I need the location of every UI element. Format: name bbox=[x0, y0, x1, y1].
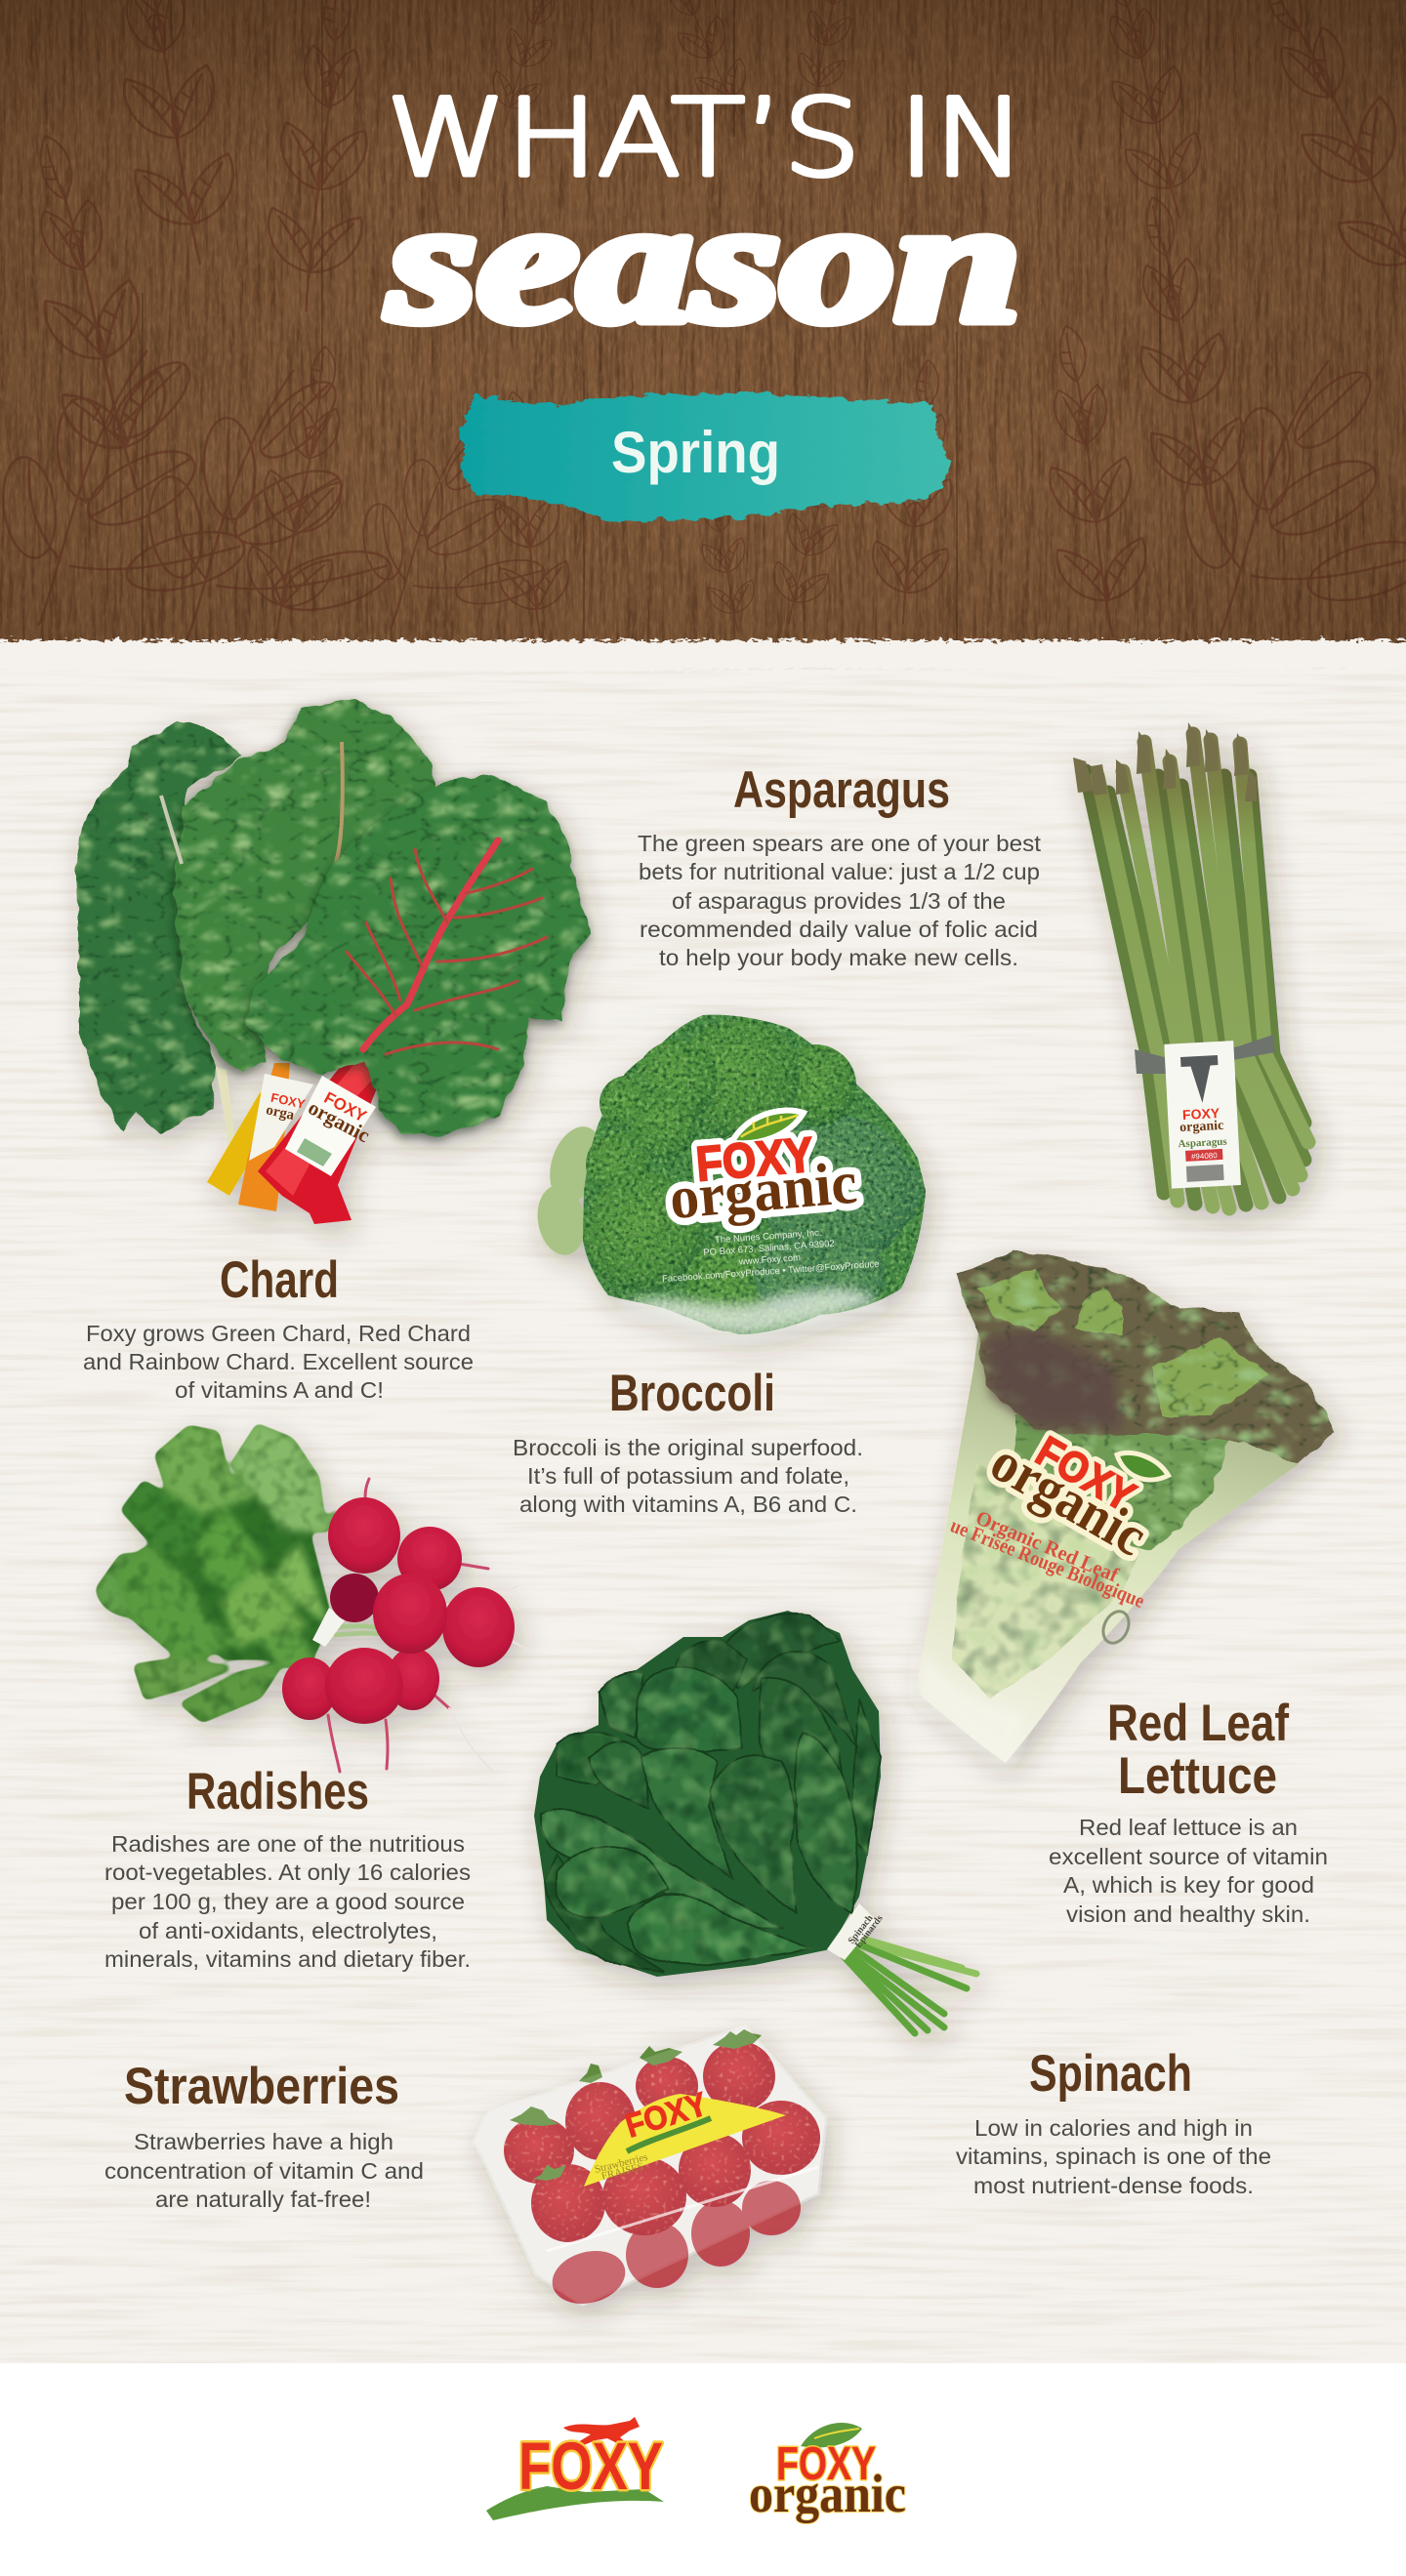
chard middle vein bbox=[317, 742, 343, 961]
logo: foxy bbox=[486, 2417, 664, 2520]
logo wordmark: FOXY bbox=[694, 1126, 815, 1192]
heading: Broccoli bbox=[609, 1365, 775, 1422]
lettuce green highlights bbox=[976, 1269, 1269, 1415]
leaf bbox=[801, 2423, 862, 2447]
chard tags: organic bbox=[305, 1095, 374, 1147]
body text: root-vegetables. At only 16 calories bbox=[104, 1860, 471, 1885]
body text: of anti-oxidants, electrolytes, bbox=[139, 1918, 437, 1943]
body text: A, which is key for good bbox=[1063, 1872, 1314, 1898]
lettuce bag sheen bbox=[921, 1650, 1025, 1761]
broccoli fine print bbox=[659, 1224, 880, 1285]
lettuce purple shade bbox=[984, 1328, 1123, 1430]
broccoli fine print: Facebook.com/FoxyProduce • Twitter@FoxyProduce bbox=[662, 1259, 880, 1285]
body text: recommended daily value of folic acid bbox=[640, 917, 1038, 942]
body text: The green spears are one of your best bbox=[638, 831, 1041, 856]
body text: per 100 g, they are a good source bbox=[111, 1889, 465, 1914]
radish tag bbox=[312, 1608, 345, 1647]
photo: red leaf lettuce bbox=[918, 1249, 1335, 1763]
asparagus band bbox=[1135, 1035, 1275, 1074]
leaf pattern bbox=[0, 0, 1406, 650]
logo leaf bbox=[729, 1109, 806, 1144]
asparagus tips bbox=[1073, 722, 1257, 801]
clamshell bbox=[476, 2027, 825, 2304]
body text bbox=[956, 2115, 1271, 2198]
body text: most nutrient-dense foods. bbox=[973, 2173, 1254, 2198]
spinach tag bbox=[827, 1903, 886, 1960]
body text bbox=[638, 831, 1041, 970]
body text: along with vitamins A, B6 and C. bbox=[519, 1492, 857, 1517]
body text: of asparagus provides 1/3 of the bbox=[672, 888, 1006, 914]
chard front leaf bbox=[247, 774, 592, 1136]
asparagus tag: Asparagus bbox=[1178, 1136, 1228, 1150]
lettuce USDA seal bbox=[1098, 1608, 1134, 1647]
heading bbox=[1107, 1695, 1289, 1805]
broccoli logo: organic bbox=[667, 1150, 859, 1232]
body text: Low in calories and high in bbox=[974, 2115, 1253, 2141]
photo: spinach bbox=[534, 1611, 976, 2033]
lettuce bag text: ue Frisée Rouge Biologique bbox=[947, 1513, 1148, 1613]
asparagus tag: FOXY bbox=[1182, 1105, 1220, 1123]
heading: Red Leaf bbox=[1107, 1695, 1289, 1752]
footer band bbox=[0, 2363, 1406, 2576]
body text: and Rainbow Chard. Excellent source bbox=[83, 1349, 474, 1374]
photo: chard bbox=[76, 699, 592, 1224]
body text: vitamins, spinach is one of the bbox=[956, 2144, 1271, 2169]
strawberry label: FOXY bbox=[621, 2085, 712, 2146]
heading: Spinach bbox=[1029, 2045, 1192, 2103]
broccoli logo: organic bbox=[667, 1150, 859, 1232]
spinach leaves bbox=[540, 1615, 881, 1972]
section: red leaf lettuce bbox=[1049, 1695, 1328, 1927]
asparagus tag bbox=[1164, 1041, 1241, 1189]
body text: Foxy grows Green Chard, Red Chard bbox=[86, 1321, 471, 1346]
body text bbox=[513, 1435, 863, 1517]
broccoli fine print: The Nunes Company, Inc. bbox=[715, 1228, 822, 1246]
body text: Red leaf lettuce is an bbox=[1079, 1815, 1298, 1840]
title bbox=[387, 76, 1025, 358]
heading: Chard bbox=[220, 1251, 339, 1309]
section: strawberries bbox=[104, 2058, 424, 2212]
broccoli side leaves bbox=[532, 1120, 611, 1259]
fox bbox=[563, 2417, 640, 2446]
logo outline: FOXY bbox=[694, 1126, 815, 1192]
broccoli fine print: www.Foxy.com bbox=[738, 1252, 801, 1268]
strawberry calyxes bbox=[510, 2029, 762, 2181]
section: broccoli bbox=[513, 1365, 863, 1517]
photo: broccoli bbox=[532, 1015, 926, 1335]
wood header bbox=[0, 0, 1406, 650]
body text: It’s full of potassium and folate, bbox=[527, 1463, 849, 1489]
body text bbox=[1049, 1815, 1328, 1927]
photo: asparagus bbox=[1073, 722, 1308, 1208]
body text: bets for nutritional value: just a 1/2 cup bbox=[639, 859, 1040, 884]
foxy wordmark: FOXY bbox=[776, 2438, 876, 2490]
body text bbox=[83, 1321, 474, 1403]
spinach tag: Spinach bbox=[847, 1913, 876, 1946]
strawberry label: FRAISES bbox=[600, 2161, 644, 2183]
strawberry label: Strawberries bbox=[594, 2151, 649, 2176]
title line: season: season bbox=[388, 165, 1021, 358]
radish roots bbox=[328, 1479, 527, 1772]
swoosh bbox=[486, 2486, 664, 2520]
section: chard bbox=[83, 1251, 474, 1403]
body text: minerals, vitamins and dietary fiber. bbox=[104, 1946, 471, 1972]
photo: strawberries bbox=[476, 2027, 825, 2311]
organic wordmark: organic bbox=[749, 2464, 906, 2523]
heading: Strawberries bbox=[124, 2058, 399, 2115]
chard tags: FOXY bbox=[269, 1090, 307, 1112]
spinach tag: Épinards bbox=[852, 1912, 886, 1950]
season badge: spring: Spring bbox=[611, 420, 780, 485]
asparagus spears bbox=[1086, 734, 1308, 1208]
chard stems bbox=[207, 1039, 383, 1224]
body text: Radishes are one of the nutritious bbox=[111, 1831, 465, 1857]
chard left vein bbox=[161, 796, 182, 864]
body text: Strawberries have a high bbox=[134, 2129, 393, 2154]
clamshell sheen bbox=[476, 2027, 825, 2304]
chard left leaf bbox=[76, 721, 243, 1133]
chard back leaf bbox=[174, 699, 436, 1072]
radish bulbs bbox=[282, 1497, 515, 1724]
broccoli plastic veil bbox=[625, 1288, 879, 1335]
strawberries lower bbox=[547, 2181, 801, 2311]
lettuce logo: organic bbox=[980, 1429, 1158, 1569]
body text: to help your body make new cells. bbox=[659, 945, 1018, 970]
body text: Broccoli is the original superfood. bbox=[513, 1435, 863, 1460]
body text: of vitamins A and C! bbox=[175, 1377, 384, 1403]
asparagus tag: #94080 bbox=[1191, 1151, 1218, 1162]
lettuce logo: organic bbox=[980, 1429, 1158, 1569]
broccoli logo bbox=[663, 1105, 859, 1232]
lettuce bag bbox=[918, 1325, 1299, 1763]
wordmark: FOXY bbox=[518, 2429, 663, 2504]
title line: what's in: WHAT’S IN bbox=[387, 76, 1025, 200]
lettuce logo: FOXY bbox=[1028, 1427, 1143, 1522]
chard tags: orga bbox=[265, 1102, 296, 1124]
body text bbox=[104, 2129, 424, 2212]
lettuce green layer bbox=[1015, 1415, 1230, 1552]
heading: Asparagus bbox=[733, 761, 950, 819]
torn paper edge bbox=[0, 640, 1406, 670]
spinach stems bbox=[842, 1938, 976, 2033]
chard tags: FOXY bbox=[321, 1088, 370, 1126]
section: radishes bbox=[104, 1763, 471, 1972]
season badge: spring bbox=[459, 392, 949, 522]
section: asparagus bbox=[638, 761, 1041, 970]
lettuce red leaves bbox=[957, 1249, 1335, 1464]
spinach base bbox=[534, 1611, 881, 1977]
chard tags bbox=[249, 1074, 376, 1176]
lettuce pale heart bbox=[952, 1464, 1162, 1698]
heading: Lettuce bbox=[1118, 1747, 1277, 1805]
paper background bbox=[0, 625, 1406, 2363]
photo: radishes bbox=[96, 1423, 527, 1772]
body text: excellent source of vitamin bbox=[1049, 1844, 1328, 1869]
body text: vision and healthy skin. bbox=[1066, 1901, 1310, 1927]
logo: foxy organic bbox=[749, 2423, 906, 2523]
lettuce logo: FOXY bbox=[1028, 1427, 1143, 1522]
broccoli head bbox=[583, 1015, 926, 1334]
radish stems bbox=[332, 1626, 379, 1635]
asparagus tag: organic bbox=[1179, 1119, 1224, 1135]
chard front veins bbox=[347, 840, 547, 1054]
strawberries upper bbox=[504, 2041, 820, 2242]
body text: are naturally fat-free! bbox=[155, 2187, 371, 2212]
body text: concentration of vitamin C and bbox=[104, 2158, 424, 2184]
radish leaves bbox=[96, 1423, 342, 1723]
section: spinach bbox=[956, 2045, 1271, 2198]
broccoli fine print: PO Box 673, Salinas, CA 93902 bbox=[703, 1239, 835, 1258]
lettuce bag text: Organic Red Leaf bbox=[972, 1506, 1123, 1587]
body text bbox=[104, 1831, 471, 1972]
heading: Radishes bbox=[186, 1763, 369, 1820]
strawberry label bbox=[584, 2085, 786, 2187]
